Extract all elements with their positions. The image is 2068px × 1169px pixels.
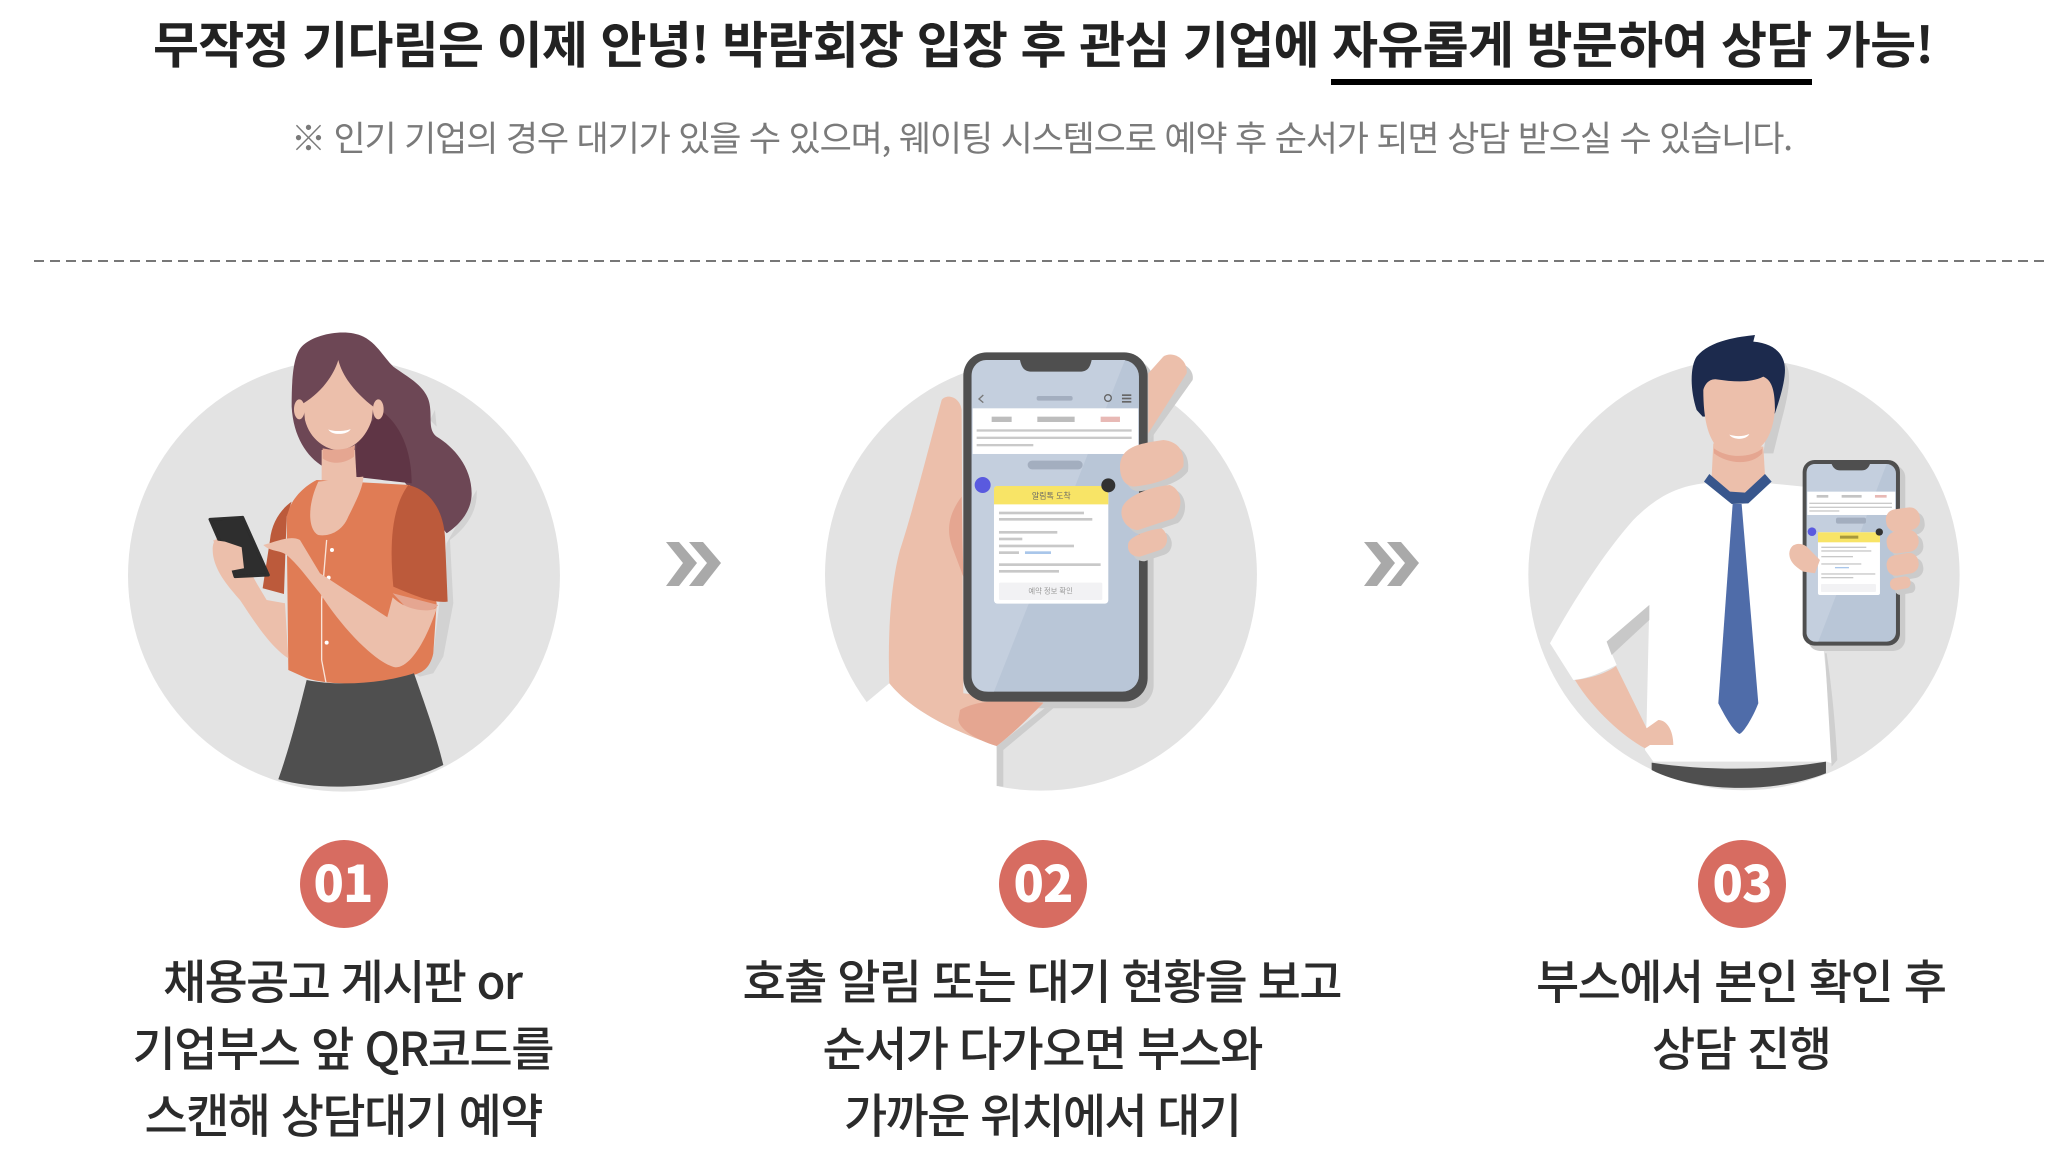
step 2 text: 호출 알림 또는 대기 현황을 보고 <box>742 944 1342 1013</box>
step 1 text: 채용공고 게시판 or <box>163 944 524 1013</box>
step 3 badge <box>1698 840 1786 928</box>
step 3 badge: 03 <box>1713 845 1771 917</box>
fingers <box>1120 440 1188 561</box>
step 2 text <box>742 944 1342 1147</box>
phone body <box>963 352 1148 702</box>
subtitle note: ※ 인기 기업의 경우 대기가 있을 수 있으며, 웨이팅 시스템으로 예약 후 순서가 되면 상담 받으실 수 있습니다. <box>291 111 1793 162</box>
step 2 text: 가까운 위치에서 대기 <box>844 1078 1242 1147</box>
step 2 badge: 02 <box>1014 845 1072 917</box>
step 1 text: 스캔해 상담대기 예약 <box>144 1078 544 1147</box>
step 2 badge <box>999 840 1087 928</box>
step 2 text: 순서가 다가오면 부스와 <box>822 1011 1264 1080</box>
illustration: man showing phone <box>1528 335 1960 790</box>
step 3 text: 상담 진행 <box>1652 1011 1832 1080</box>
arrow 1 <box>666 542 721 586</box>
phone body: 예약 정보 확인 <box>1028 585 1073 596</box>
title: 무작정 기다림은 이제 안녕! 박람회장 입장 후 관심 기업에 자유롭게 방문하여 상담 가능! <box>153 6 1934 78</box>
step 1 text <box>132 944 554 1147</box>
arrow 2 <box>1364 542 1419 586</box>
step 1 badge: 01 <box>314 845 372 917</box>
small phone <box>1803 460 1905 651</box>
step 3 text <box>1536 944 1947 1080</box>
step 1 badge <box>300 840 388 928</box>
step 3 text: 부스에서 본인 확인 후 <box>1536 944 1947 1013</box>
phone body: 알림톡 도착 <box>1032 490 1071 501</box>
illustration: woman using phone <box>128 333 560 792</box>
illustration: hand holding phone <box>825 352 1257 797</box>
step 1 text: 기업부스 앞 QR코드를 <box>132 1011 554 1080</box>
